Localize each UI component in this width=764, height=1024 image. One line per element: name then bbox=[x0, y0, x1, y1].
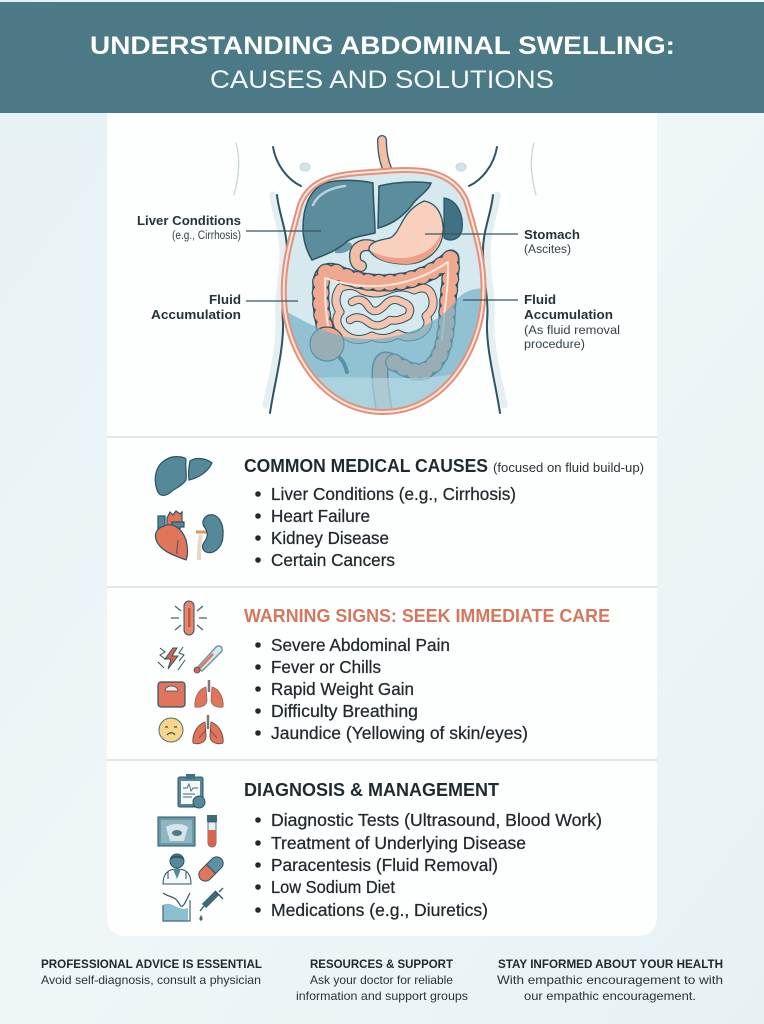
bullet list: Severe Abdominal Pain bbox=[271, 635, 450, 655]
spleen bbox=[444, 198, 462, 240]
bullet list: Heart Failure bbox=[271, 506, 370, 526]
anatomy illustration bbox=[234, 140, 536, 420]
footer: stay informed: With empathic encouragement to with bbox=[497, 973, 723, 987]
callout: liver conditions: (e.g., Cirrhosis) bbox=[172, 230, 241, 242]
liver bbox=[303, 180, 431, 260]
abdominal wall ring bbox=[284, 170, 484, 412]
icon: fluid basin bbox=[163, 893, 190, 921]
torso outline bbox=[234, 143, 536, 413]
bullet list: Treatment of Underlying Disease bbox=[271, 833, 526, 853]
panel: common medical causes bbox=[155, 456, 644, 570]
icon: inflamed lungs bbox=[193, 715, 223, 744]
footer: professional advice: PROFESSIONAL ADVICE IS ESSENTIAL bbox=[41, 959, 262, 971]
heading: WARNING SIGNS: SEEK IMMEDIATE CARE bbox=[244, 606, 610, 626]
callout: stomach bbox=[425, 227, 580, 256]
abdominal cavity bbox=[284, 170, 484, 412]
icon: ultrasound screen bbox=[158, 817, 195, 846]
title: CAUSES AND SOLUTIONS bbox=[210, 66, 554, 94]
small intestine bbox=[336, 285, 433, 340]
callout: fluid accumulation right: Accumulation bbox=[524, 307, 613, 322]
bullet list: Jaundice (Yellowing of skin/eyes) bbox=[271, 723, 528, 743]
footer: resources and support bbox=[296, 959, 468, 1003]
bullet list: Low Sodium Diet bbox=[271, 877, 395, 897]
bullet list: Medications (e.g., Diuretics) bbox=[271, 900, 488, 920]
bullet list: Certain Cancers bbox=[271, 550, 395, 570]
bullet list: Kidney Disease bbox=[271, 528, 389, 548]
panel: diagnosis and management bbox=[158, 774, 602, 921]
heading: COMMON MEDICAL CAUSES bbox=[244, 456, 488, 476]
icon: doctor bbox=[163, 854, 191, 884]
bullet list: Liver Conditions (e.g., Cirrhosis) bbox=[271, 484, 516, 504]
callout: fluid accumulation left bbox=[151, 292, 298, 322]
callout: liver conditions: Liver Conditions bbox=[137, 213, 241, 228]
footer: stay informed bbox=[497, 959, 723, 1003]
torso shading bbox=[266, 195, 504, 405]
gallbladder bbox=[335, 242, 352, 253]
icon: syringe bbox=[199, 888, 223, 921]
icon: lungs bbox=[195, 680, 223, 707]
title: UNDERSTANDING ABDOMINAL SWELLING: bbox=[90, 32, 675, 60]
title bbox=[90, 32, 675, 94]
stomach bbox=[355, 201, 443, 266]
footer: professional advice bbox=[41, 959, 262, 987]
callout: fluid accumulation right bbox=[463, 292, 620, 351]
bullet list bbox=[255, 635, 528, 743]
callout: liver conditions bbox=[137, 213, 321, 242]
footer: resources and support: information and support groups bbox=[296, 989, 468, 1003]
icon: lightning pain bbox=[158, 647, 185, 670]
icon: unwell face bbox=[159, 718, 183, 742]
icon: liver bbox=[155, 457, 212, 495]
callout: stomach: (Ascites) bbox=[524, 244, 571, 256]
bullet list bbox=[255, 810, 602, 920]
icon: capsule bbox=[196, 854, 226, 884]
callout: fluid accumulation left: Fluid bbox=[209, 292, 241, 307]
large intestine bbox=[321, 258, 451, 410]
icon: kidney bbox=[196, 515, 223, 560]
icon: clipboard bbox=[178, 774, 205, 808]
esophagus bbox=[382, 140, 395, 182]
callout: fluid accumulation right: procedure) bbox=[524, 339, 585, 351]
icon: blood tube bbox=[207, 815, 217, 847]
bullet list: Difficulty Breathing bbox=[271, 701, 418, 721]
heading: DIAGNOSIS & MANAGEMENT bbox=[244, 780, 499, 800]
bullet list: Paracentesis (Fluid Removal) bbox=[271, 855, 498, 875]
panel: warning signs bbox=[158, 601, 610, 744]
callout: stomach: Stomach bbox=[524, 227, 580, 242]
icon: heart bbox=[155, 511, 188, 560]
bullet list bbox=[255, 484, 516, 570]
icon: thermometer bbox=[194, 646, 222, 673]
footer: resources and support: Ask your doctor for reliable bbox=[310, 973, 453, 987]
footer: stay informed: STAY INFORMED ABOUT YOUR HEALTH bbox=[498, 959, 723, 971]
header banner bbox=[0, 2, 764, 113]
icon: weight scale bbox=[158, 682, 185, 707]
icon: alert thermometer bbox=[171, 601, 207, 635]
cecum and appendix bbox=[310, 327, 347, 372]
footer: stay informed: our empathic encouragement. bbox=[524, 989, 696, 1003]
heading note: (focused on fluid build-up) bbox=[493, 460, 644, 475]
fluid accumulation bbox=[288, 288, 480, 409]
footer: resources and support: RESOURCES & SUPPORT bbox=[310, 959, 453, 971]
callout: fluid accumulation left: Accumulation bbox=[151, 307, 241, 322]
callout: fluid accumulation right: (As fluid removal bbox=[524, 325, 620, 337]
white content panel bbox=[107, 113, 657, 936]
bullet list: Fever or Chills bbox=[271, 657, 381, 677]
footer: professional advice: Avoid self-diagnosis, consult a physician bbox=[41, 973, 261, 987]
bullet list: Diagnostic Tests (Ultrasound, Blood Work) bbox=[271, 810, 602, 830]
callout: fluid accumulation right: Fluid bbox=[524, 292, 556, 307]
bullet list: Rapid Weight Gain bbox=[271, 679, 414, 699]
